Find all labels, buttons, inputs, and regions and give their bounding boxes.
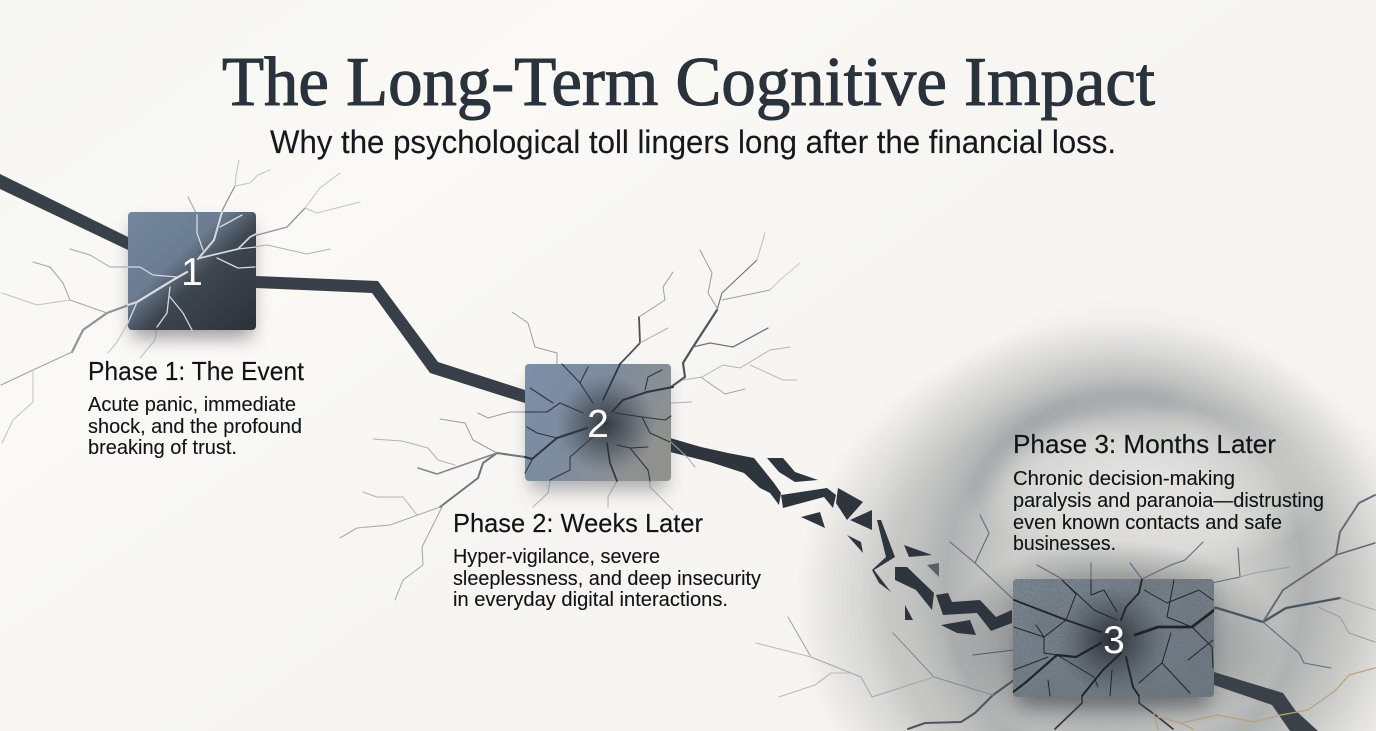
phase 3 text block: even known contacts and safe (1013, 511, 1282, 534)
number 2: 2 (587, 403, 609, 446)
phase 3 text block: businesses. (1013, 532, 1116, 555)
number 3: 3 (1103, 619, 1125, 662)
title: The Long-Term Cognitive Impact (222, 44, 1156, 121)
phase 3 text block: Chronic decision-making (1013, 467, 1235, 490)
phase 2 text block: in everyday digital interactions. (453, 588, 728, 611)
cracks around phase 1 (1, 160, 360, 443)
phase 1 text block (88, 356, 305, 459)
phase 1 text block: Phase 1: The Event (88, 356, 305, 386)
phase 2 text block: Hyper-vigilance, severe (453, 545, 660, 568)
cracks around phase 2 (340, 233, 800, 600)
square 1 (128, 212, 256, 338)
phase 2 text block (453, 508, 762, 611)
phase 3 text block (1013, 429, 1324, 555)
phase 2 text block: sleeplessness, and deep insecurity (453, 567, 762, 590)
swirl vortex behind phase 3 (780, 290, 1376, 731)
phase 1 text block: breaking of trust. (88, 436, 237, 459)
timeline path: shattered segment between squares 2 and 3 (670, 438, 1012, 635)
timeline path: square 1 to square 2 (256, 276, 525, 403)
square 3 (1013, 579, 1217, 707)
subtitle: Why the psychological toll lingers long after the financial loss. (270, 124, 1116, 160)
timeline path: start to square 1 (0, 174, 128, 250)
timeline path: exit from square 3 (1214, 672, 1318, 731)
phase 1 text block: Acute panic, immediate (88, 393, 296, 416)
number 1: 1 (181, 251, 203, 294)
gold repair cracks (1153, 668, 1375, 729)
phase 2 text block: Phase 2: Weeks Later (453, 508, 703, 538)
phase 3 text block: Phase 3: Months Later (1013, 429, 1276, 459)
square 2 (525, 364, 673, 490)
phase 3 text block: paralysis and paranoia—distrusting (1013, 489, 1324, 512)
cracks around phase 3 (756, 495, 1375, 729)
phase 1 text block: shock, and the profound (88, 415, 302, 438)
